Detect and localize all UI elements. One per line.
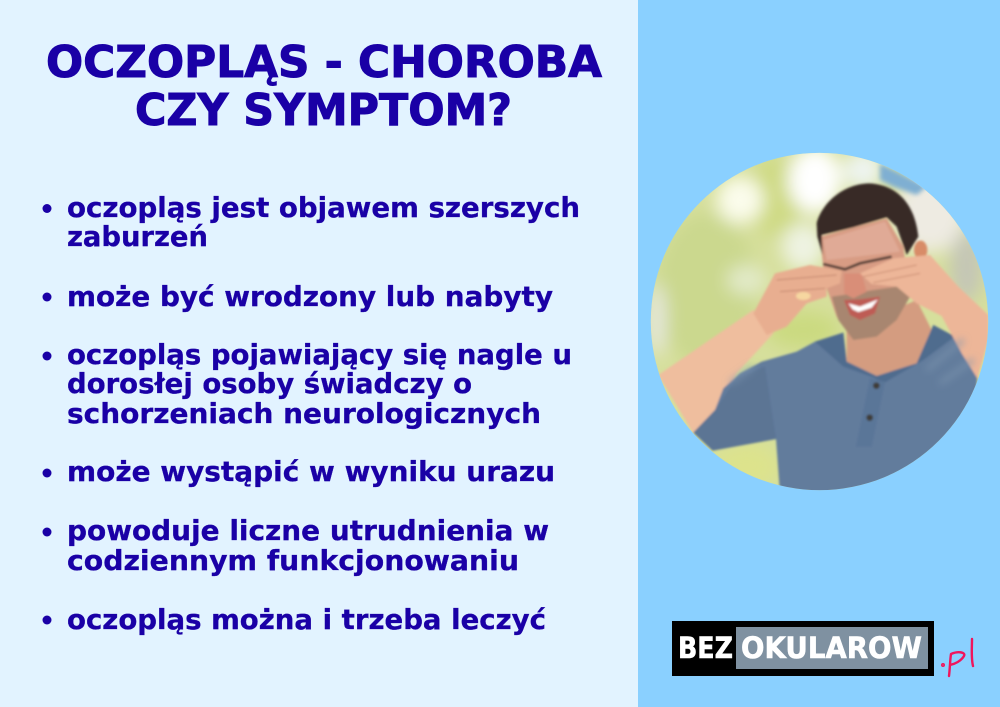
shirt light folds xyxy=(730,340,973,383)
bullet: utrudnienia: codziennym funkcjonowaniu xyxy=(67,545,519,577)
nose xyxy=(844,273,867,298)
bullet: utrudnienia: powoduje liczne utrudnienia w xyxy=(67,515,549,547)
bullet: pojawiający się nagle xyxy=(42,339,572,430)
mouth xyxy=(844,297,880,320)
right fingers xyxy=(863,265,920,283)
bullet: objaw szerszych zaburzeń: oczopląs jest objawem szerszych xyxy=(67,192,580,224)
teeth xyxy=(848,299,878,312)
left fingers xyxy=(777,275,837,292)
placket xyxy=(865,382,881,422)
logo handwritten .pl xyxy=(942,639,973,676)
bullet: pojawiający się nagle: schorzeniach neurologicznych xyxy=(67,398,541,430)
title xyxy=(46,37,602,136)
left arm xyxy=(658,310,773,433)
panel: left background xyxy=(0,0,638,707)
photo: man rubbing eyes in a circle xyxy=(650,152,988,490)
bullet: w wyniku urazu: może wystąpić w wyniku urazu xyxy=(67,456,555,488)
left hand xyxy=(753,265,842,335)
bullet: objaw szerszych zaburzeń: zaburzeń xyxy=(67,221,208,253)
logo black box xyxy=(672,621,934,676)
logo text OKULAROW: OKULAROW xyxy=(741,631,922,665)
bullet: utrudnienia xyxy=(42,515,549,577)
bullet: pojawiający się nagle: dorosłej osoby świadczy o xyxy=(67,368,472,400)
shirt xyxy=(714,337,978,490)
buttons xyxy=(873,382,880,389)
face xyxy=(820,218,910,340)
bullet: objaw szerszych zaburzeń xyxy=(42,192,580,253)
ear xyxy=(914,241,927,259)
bullet: można i trzeba leczyć: oczopląs można i trzeba leczyć xyxy=(67,604,546,636)
logo text BEZ: BEZ xyxy=(678,631,733,665)
panel: right background xyxy=(638,0,1000,707)
bullet: wrodzony lub nabyty: może być wrodzony lub nabyty xyxy=(67,281,553,313)
hair xyxy=(817,183,918,255)
neck xyxy=(847,300,932,376)
title: CZY SYMPTOM? xyxy=(135,85,512,136)
forehead highlight xyxy=(823,222,900,260)
sleeve shadow xyxy=(695,426,774,450)
bullet: pojawiający się nagle: oczopląs pojawiający się nagle u xyxy=(67,339,572,371)
background building xyxy=(880,163,927,195)
shirt collar xyxy=(815,325,955,383)
bullet list xyxy=(42,192,580,636)
logo grey box xyxy=(736,627,928,669)
logo: BEZ OKULAROW .pl xyxy=(672,621,973,676)
brows xyxy=(823,257,892,269)
right hand and arm xyxy=(860,255,988,378)
sunlit gap between arm and hand xyxy=(796,292,811,300)
title: OCZOPLĄS - CHOROBA xyxy=(46,37,602,88)
beard xyxy=(832,287,910,340)
